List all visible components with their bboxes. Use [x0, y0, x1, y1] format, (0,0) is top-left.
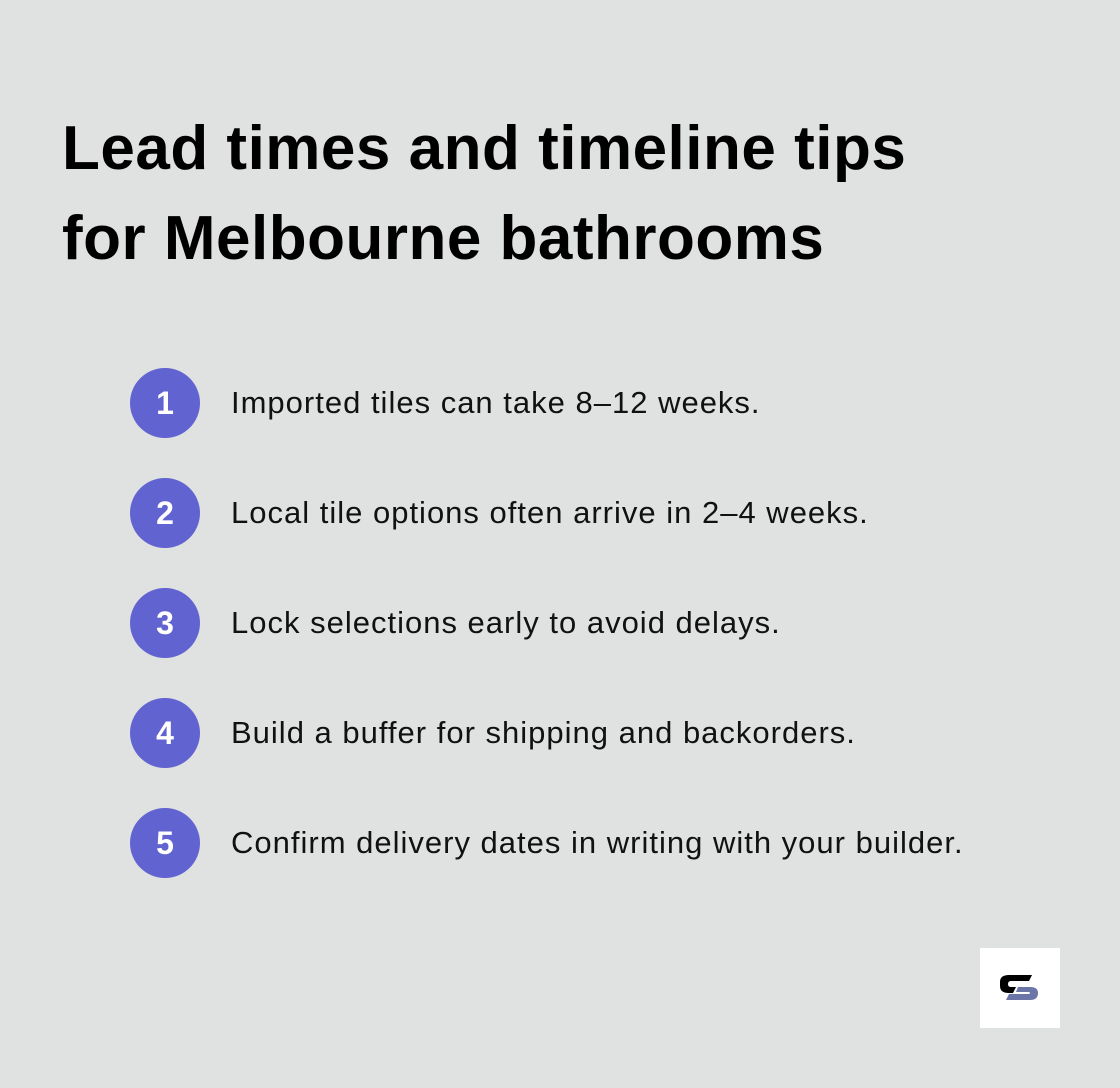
item 4: 4: [156, 715, 174, 751]
item 1: Imported tiles can take 8–12 weeks.: [231, 385, 761, 420]
item 5: Confirm delivery dates in writing with your builder.: [231, 825, 964, 860]
item 5: 5: [156, 825, 174, 861]
item 1: [130, 368, 761, 438]
item 1: 1: [156, 385, 174, 421]
item 4: [130, 698, 856, 768]
item 4: Build a buffer for shipping and backorders.: [231, 715, 856, 750]
item 2: Local tile options often arrive in 2–4 weeks.: [231, 495, 869, 530]
title: for Melbourne bathrooms: [62, 204, 824, 273]
item 2: 2: [156, 495, 174, 531]
item 3: Lock selections early to avoid delays.: [231, 605, 781, 640]
item 2: [130, 478, 869, 548]
logo: [980, 948, 1060, 1028]
item 3: 3: [156, 605, 174, 641]
item 5: [130, 808, 964, 878]
title: [62, 114, 906, 273]
title: Lead times and timeline tips: [62, 114, 906, 183]
item 3: [130, 588, 781, 658]
